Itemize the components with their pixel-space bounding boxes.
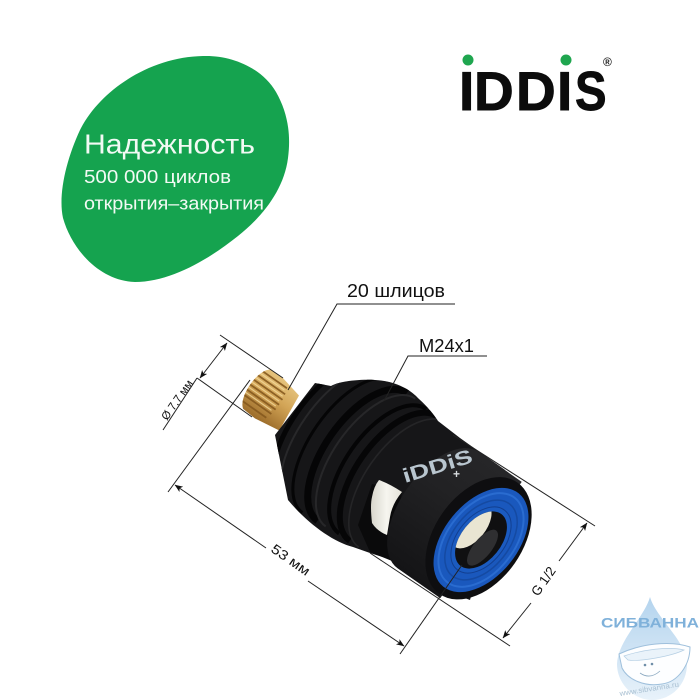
dimension: stem diameter: Ø 7,7 мм [160, 378, 196, 423]
bore with white core [455, 511, 507, 569]
end face black rim [403, 457, 554, 619]
dimension: M24x1 thread [384, 336, 487, 401]
blue seal ring [434, 488, 528, 592]
white insert [371, 480, 402, 535]
cap logo: iDDiS [400, 446, 475, 488]
bathtub [619, 643, 690, 685]
dimension: stem diameter [160, 335, 283, 430]
logo: IDDIS: IDDI [459, 60, 572, 122]
logo dot left [462, 54, 474, 66]
dimension: 20 splines [288, 281, 455, 390]
text: open-close: открытия–закрытия [84, 192, 264, 214]
brand name: СИБВАННА [601, 614, 699, 630]
cavity behind insert [358, 484, 402, 561]
cap logo: + [453, 467, 460, 481]
cap logo [400, 446, 475, 488]
brass stem [242, 370, 299, 430]
end cap [387, 448, 532, 600]
water drop [617, 597, 687, 700]
logo: IDDIS [459, 54, 612, 122]
dimension: G 1/2: G 1/2 [528, 564, 559, 599]
heading: reliability: Надежность [84, 128, 255, 160]
logo dot right [560, 54, 572, 66]
black body [275, 380, 505, 600]
product: cartridge [242, 370, 532, 600]
dimension: 20 splines: 20 шлицов [347, 281, 445, 301]
website: www.sibvanna.ru [618, 680, 680, 698]
dimension: G 1/2 [370, 435, 595, 646]
text: cycle count: 500 000 циклов [84, 166, 231, 187]
panel: green reliability blob [62, 56, 289, 282]
logo letter S: S [575, 61, 607, 122]
dimension: length 53 mm [168, 380, 462, 654]
dimension: length 53 mm: 53 мм [268, 541, 313, 579]
watermark: Sibvanna [601, 597, 699, 700]
registered mark: ® [603, 55, 612, 69]
dimension: M24x1 thread: M24x1 [419, 336, 474, 356]
